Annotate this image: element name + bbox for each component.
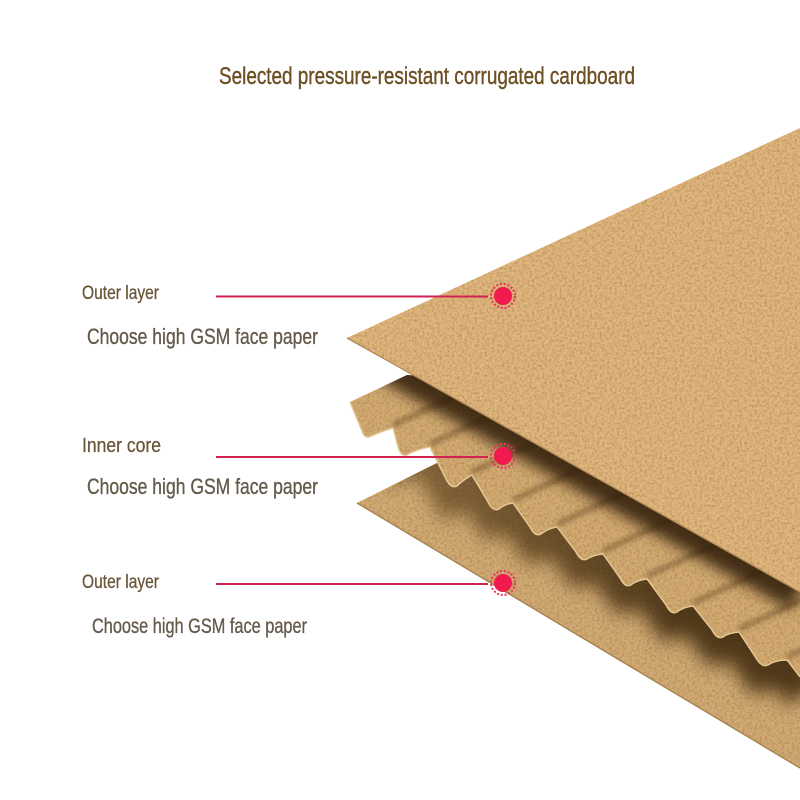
bottom face sheet — [356, 462, 800, 769]
description: Choose high GSM face paper — [92, 615, 307, 638]
leader line — [216, 456, 488, 458]
callout: outer layer (top) — [82, 283, 515, 349]
description: Choose high GSM face paper — [87, 324, 318, 349]
marker dot — [491, 571, 515, 595]
leader line — [216, 583, 488, 585]
marker dot — [491, 444, 515, 468]
description: Choose high GSM face paper — [87, 474, 318, 499]
corrugated cardboard illustration — [347, 128, 800, 768]
flute crease shading — [377, 375, 800, 661]
label: inner core: Inner core — [82, 435, 161, 457]
marker dot — [491, 284, 515, 308]
callout: outer layer (bottom) — [82, 571, 515, 638]
label: outer layer: Outer layer — [82, 572, 160, 593]
title: Selected pressure-resistant corrugated cardboard — [219, 63, 635, 90]
label: outer layer: Outer layer — [82, 283, 160, 304]
leader line — [216, 296, 488, 298]
top face sheet — [347, 128, 800, 592]
callout: inner core — [82, 435, 515, 499]
corrugated inner core — [349, 375, 800, 678]
